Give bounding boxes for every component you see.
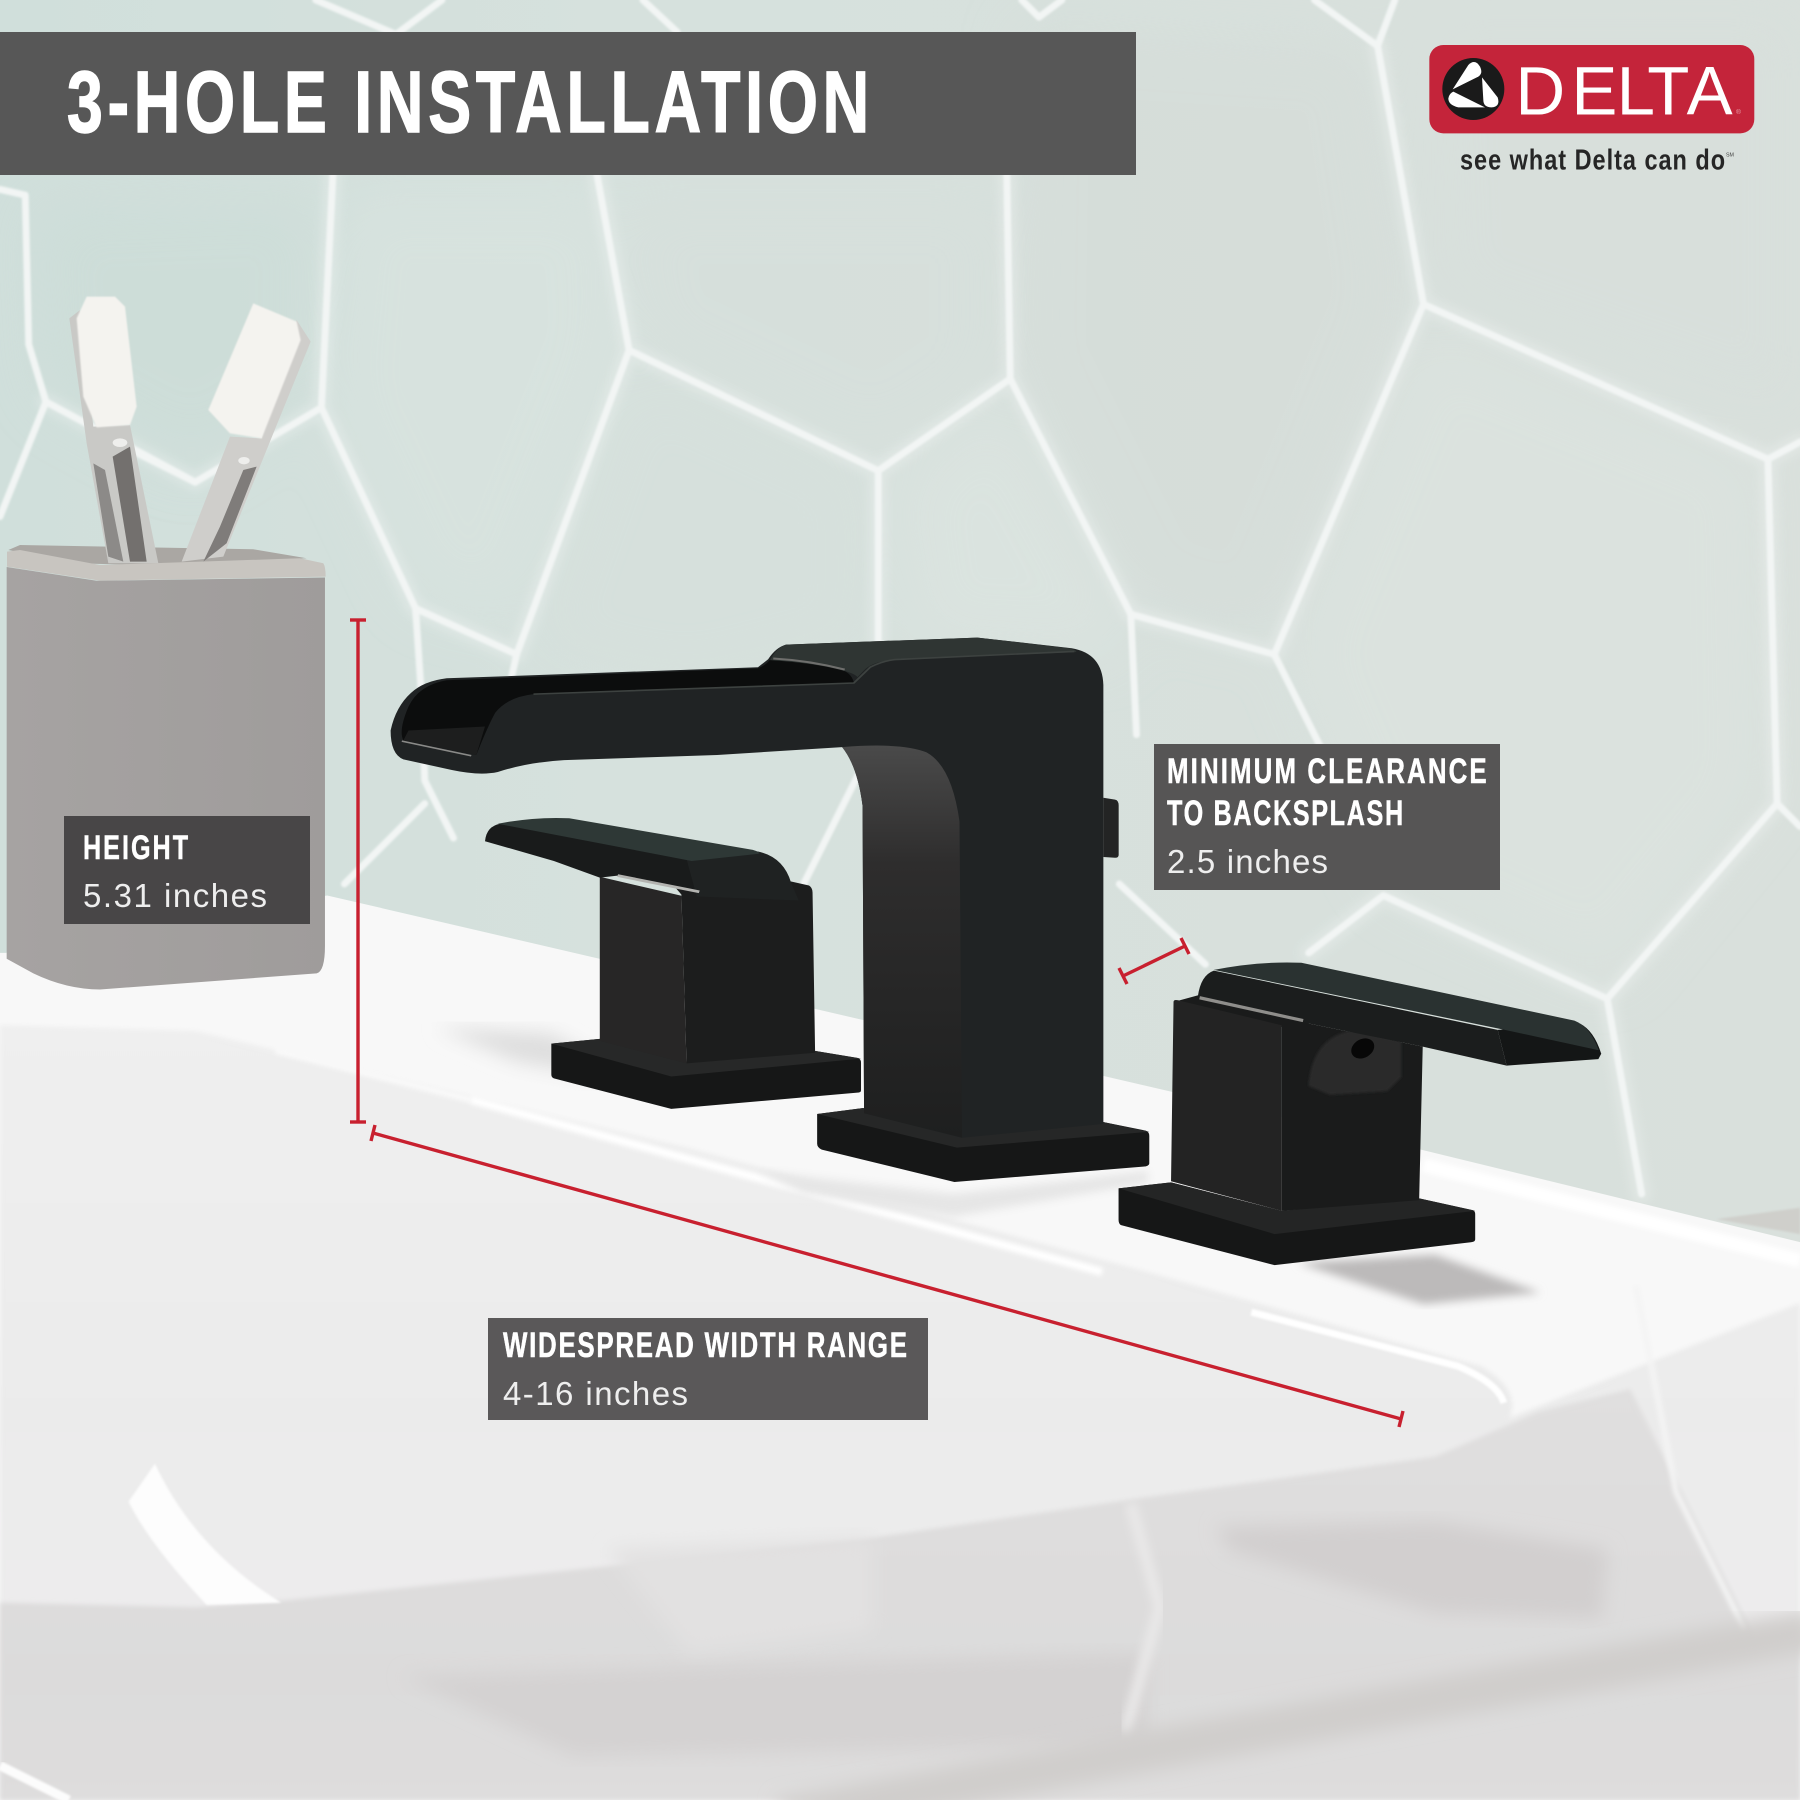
callout: widespread width range: WIDESPREAD WIDTH RANGE bbox=[503, 1325, 907, 1365]
Delta logo bbox=[1429, 45, 1754, 176]
holder inner wall bbox=[8, 545, 307, 565]
right handle base bbox=[1119, 1182, 1475, 1265]
right handle lever bbox=[1198, 962, 1601, 1066]
sink countertop and basin bbox=[0, 895, 1800, 1800]
left handle lever bbox=[485, 818, 799, 901]
title banner bbox=[0, 32, 1136, 175]
callout: widespread width range bbox=[488, 1318, 928, 1420]
callout: height: 5.31 inches bbox=[83, 877, 267, 914]
Delta logo: ® bbox=[1736, 108, 1741, 116]
pop-up lift rod bbox=[1103, 798, 1119, 858]
holder body bbox=[7, 567, 325, 989]
left handle base bbox=[551, 1039, 861, 1109]
height dimension line bbox=[350, 620, 366, 1122]
soft bevel glow bbox=[46, 46, 1800, 1194]
background: tiled backsplash bbox=[0, 0, 1800, 1378]
callout: minimum clearance: MINIMUM CLEARANCE bbox=[1167, 751, 1487, 791]
faucet spout body bbox=[391, 638, 1103, 1138]
faucet base plate bbox=[817, 1108, 1149, 1182]
left handle box bbox=[600, 877, 815, 1063]
clearance dimension line bbox=[1119, 938, 1189, 984]
toothbrush 1 bbox=[69, 297, 158, 563]
left handle bbox=[485, 818, 861, 1109]
callout: height bbox=[64, 816, 310, 924]
right handle box bbox=[1171, 995, 1423, 1211]
callout: minimum clearance: 2.5 inches bbox=[1167, 843, 1328, 880]
toothbrush 2 bbox=[182, 303, 311, 562]
callout: minimum clearance: TO BACKSPLASH bbox=[1167, 794, 1403, 833]
Delta logo: DELTA bbox=[1515, 52, 1733, 129]
right handle bbox=[1119, 962, 1601, 1265]
callout: widespread width range: 4-16 inches bbox=[503, 1375, 688, 1412]
width dimension line bbox=[371, 1125, 1403, 1427]
holder rim bbox=[7, 550, 326, 581]
Delta logo: SM bbox=[1726, 153, 1734, 159]
title banner: 3-HOLE INSTALLATION bbox=[67, 55, 869, 151]
callout: height: HEIGHT bbox=[83, 829, 188, 867]
callout: minimum clearance bbox=[1154, 744, 1500, 890]
main faucet bbox=[391, 638, 1149, 1182]
toothbrush holder with toothbrushes bbox=[7, 297, 326, 989]
Delta logo: see what Delta can do bbox=[1460, 143, 1725, 176]
